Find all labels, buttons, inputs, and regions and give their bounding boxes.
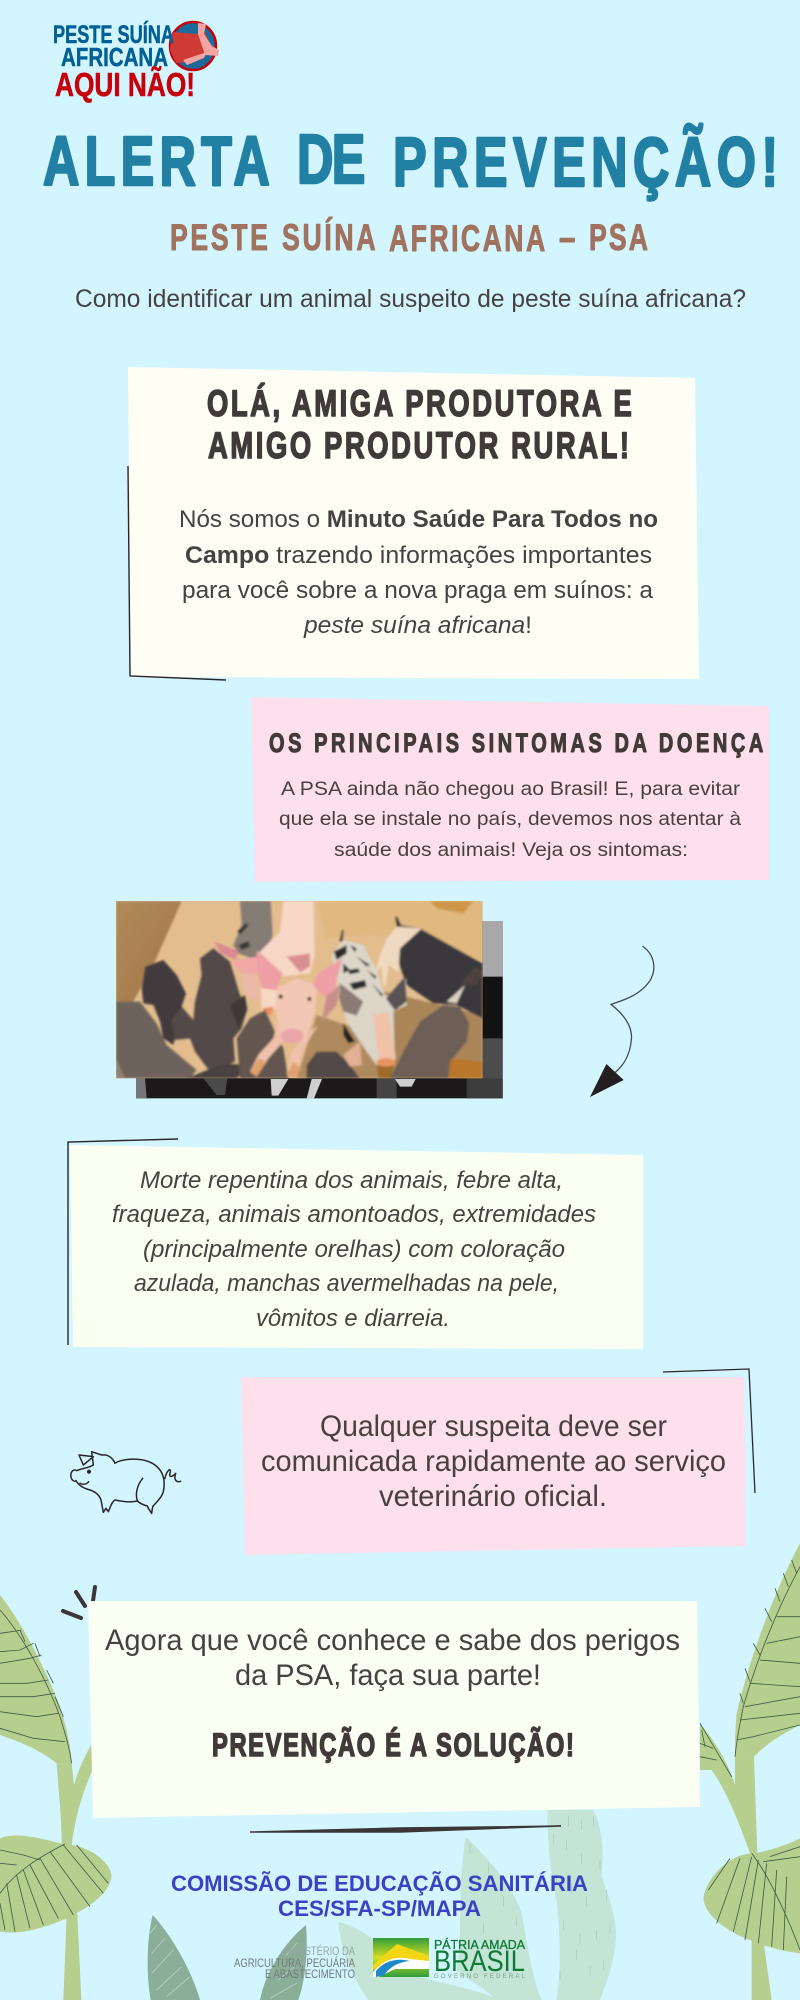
logo: pátria amada brasil <box>373 1937 526 1980</box>
logo: peste suína africana aqui não <box>53 20 219 103</box>
ministry logo text: MINISTÉRIO DA <box>285 1943 355 1958</box>
text: symptoms intro: A PSA ainda não chegou ao Brasil! E, para evitar <box>281 779 741 800</box>
text: greeting body <box>179 506 658 639</box>
arrow: curved pointing to text <box>590 946 654 1097</box>
subtitle: PESTE <box>170 217 268 258</box>
logo: pátria amada brasil: BRASIL <box>434 1945 525 1978</box>
ministry logo text <box>234 1943 355 1981</box>
text: report: veterinário oficial. <box>379 1480 607 1513</box>
text: greeting body: Campo trazendo informações importantes <box>185 542 652 569</box>
right plant and pale back leaves <box>338 1543 800 2000</box>
panel: call to action <box>88 1601 700 1818</box>
logo: peste suína africana aqui não: AQUI NÃO! <box>55 66 195 103</box>
heading: greeting <box>207 382 632 466</box>
pink pig head and legs <box>322 985 340 1022</box>
big left pig <box>116 1002 197 1078</box>
front colour photo <box>116 901 483 1078</box>
black and white pig <box>387 925 483 1018</box>
subtitle: – <box>559 218 575 259</box>
logo: pátria amada brasil: GOVERNO FEDERAL <box>434 1974 526 1980</box>
back offset photo <box>136 921 503 1098</box>
panel: greeting <box>128 367 699 680</box>
text: symptoms <box>112 1167 596 1332</box>
photo: pigs in a pen <box>116 901 503 1098</box>
subtitle: AFRICANA <box>389 218 545 259</box>
text: symptoms: Morte repentina dos animais, febre alta, <box>140 1167 563 1194</box>
text: greeting body: para você sobre a nova praga em suínos: a <box>182 577 654 604</box>
pink pig body <box>257 901 315 1013</box>
heading: symptoms: OS PRINCIPAIS SINTOMAS DA DOENÇA <box>269 728 763 759</box>
text: call to action: da PSA, faça sua parte! <box>235 1659 541 1692</box>
icon: emphasis ticks <box>63 1587 95 1618</box>
title: ALERTA <box>43 122 270 200</box>
dark pig <box>172 948 247 1072</box>
text: symptoms intro: que ela se instale no país, devemos nos atentar à <box>279 809 741 830</box>
text: greeting body: Nós somos o Minuto Saúde Para Todos no <box>179 506 658 533</box>
footer commission <box>171 1871 588 1921</box>
flag mark <box>373 1938 429 1977</box>
grey pig <box>233 901 273 960</box>
ministry logo text: AGRICULTURA, PECUÁRIA <box>234 1955 355 1970</box>
panel: main symptoms <box>251 697 769 882</box>
icon: pig outline <box>71 1452 181 1513</box>
title: PREVENÇÃO! <box>393 123 778 201</box>
lower right big pig <box>390 1005 469 1078</box>
text: symptoms: fraqueza, animais amontoados, extremidades <box>112 1201 596 1228</box>
text: report <box>261 1410 726 1513</box>
panel: report suspicion <box>241 1369 755 1555</box>
text: symptoms: azulada, manchas avermelhadas na pele, <box>134 1270 559 1297</box>
logo lens with pig <box>170 22 219 70</box>
heading: prevention: PREVENÇÃO É A SOLUÇÃO! <box>212 1728 574 1763</box>
lower center dark pig <box>307 1052 360 1078</box>
left plant <box>0 1595 307 2000</box>
subtitle: SUÍNA <box>282 217 376 258</box>
text: call to action <box>105 1624 680 1692</box>
ministry logo text: E ABASTECIMENTO <box>265 1967 355 1981</box>
pale back leaves <box>338 1810 616 2000</box>
subtitle <box>170 217 648 259</box>
text: call to action: Agora que você conhece e sabe dos perigos <box>105 1624 680 1657</box>
dark back leaves <box>148 1915 307 2000</box>
text: symptoms: vômitos e diarreia. <box>256 1305 450 1332</box>
spotted pig <box>332 940 407 1065</box>
question line: Como identificar um animal suspeito de peste suína africana? <box>75 285 746 313</box>
text: report: comunicada rapidamente ao serviço <box>261 1445 726 1478</box>
footer commission: CES/SFA-SP/MAPA <box>278 1896 481 1921</box>
heading: greeting: AMIGO PRODUTOR RURAL! <box>208 425 629 466</box>
logo: peste suína africana aqui não: PESTE SUÍNA <box>53 20 174 49</box>
text: greeting body: peste suína africana! <box>303 612 532 639</box>
text: symptoms: (principalmente orelhas) com coloração <box>143 1236 565 1263</box>
subtitle: PSA <box>589 217 648 258</box>
title: DE <box>297 120 365 198</box>
text: report: Qualquer suspeita deve ser <box>320 1410 667 1443</box>
small black pig <box>142 960 186 1045</box>
logo: pátria amada brasil: PÁTRIA AMADA <box>434 1937 525 1952</box>
text: symptoms intro: saúde dos animais! Veja os sintomas: <box>334 840 688 861</box>
logo: peste suína africana aqui não: AFRICANA <box>61 42 168 72</box>
footer commission: COMISSÃO DE EDUCAÇÃO SANITÁRIA <box>171 1871 588 1896</box>
panel: symptoms list <box>68 1139 643 1349</box>
center dark pig <box>237 1010 288 1078</box>
title <box>43 120 778 201</box>
text: symptoms intro <box>279 779 741 861</box>
heading: greeting: OLÁ, AMIGA PRODUTORA E <box>207 382 632 424</box>
